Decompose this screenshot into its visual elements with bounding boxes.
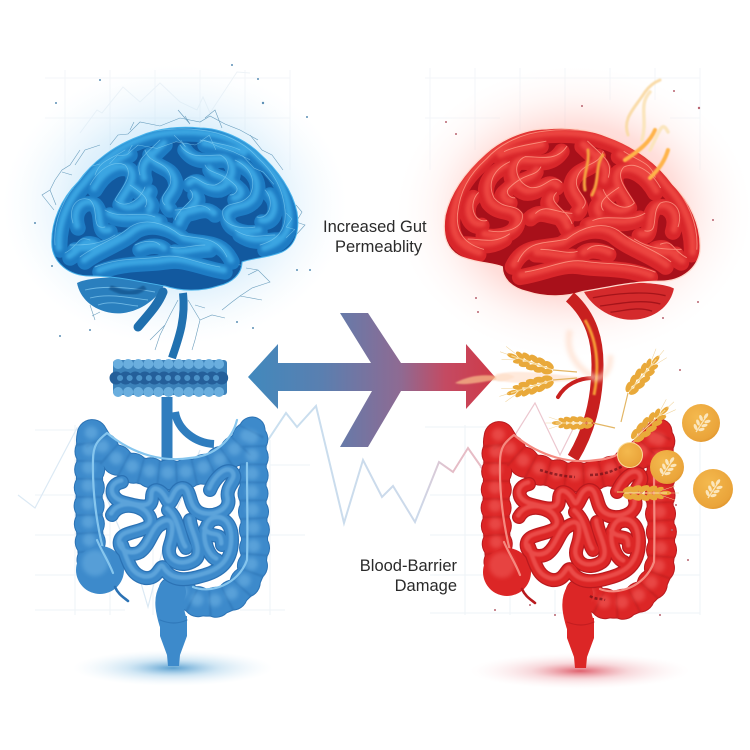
brain stem stub (138, 292, 163, 327)
brain stem fire core (585, 320, 597, 395)
cerebellum (77, 277, 165, 313)
cerebrum (51, 126, 298, 291)
floor shadow red (470, 653, 690, 689)
arrow flame trail (455, 372, 590, 384)
red brain stem (570, 297, 598, 458)
icon: blue intestine (76, 420, 255, 666)
vessel to gut (167, 397, 214, 462)
inflamed dark patches (540, 465, 625, 600)
red cerebellum (582, 283, 674, 320)
flames on brain (584, 80, 668, 195)
label: increased gut permeability: Permeablity (335, 238, 423, 256)
double arrow with chevron (248, 313, 495, 447)
label: increased gut permeability: Increased Gut (323, 218, 427, 236)
label: blood-barrier damage (360, 557, 457, 595)
red brain glow (396, 66, 750, 358)
wheat ears (497, 343, 680, 502)
background chart grids (45, 68, 700, 170)
panel: healthy brain (blue) (42, 110, 305, 358)
spinal cord (172, 293, 184, 358)
stem flames (569, 330, 610, 378)
panel: inflamed brain (red) (444, 80, 700, 458)
background trend line (18, 72, 575, 607)
blue brain glow (3, 65, 347, 345)
panel: blood barrier band (113, 360, 227, 395)
icon: red intestine (483, 422, 662, 668)
neural web (42, 110, 305, 350)
label: blood-barrier damage: Damage (395, 577, 457, 595)
red vessel branch (558, 378, 593, 397)
label: increased gut permeability (323, 218, 427, 256)
red cerebrum (444, 128, 700, 296)
scattered particles (34, 64, 311, 337)
gold coins (618, 404, 733, 509)
floor shadow blue (73, 650, 273, 686)
label: blood-barrier damage: Blood-Barrier (360, 557, 457, 575)
red brain mirrored body (444, 128, 700, 320)
